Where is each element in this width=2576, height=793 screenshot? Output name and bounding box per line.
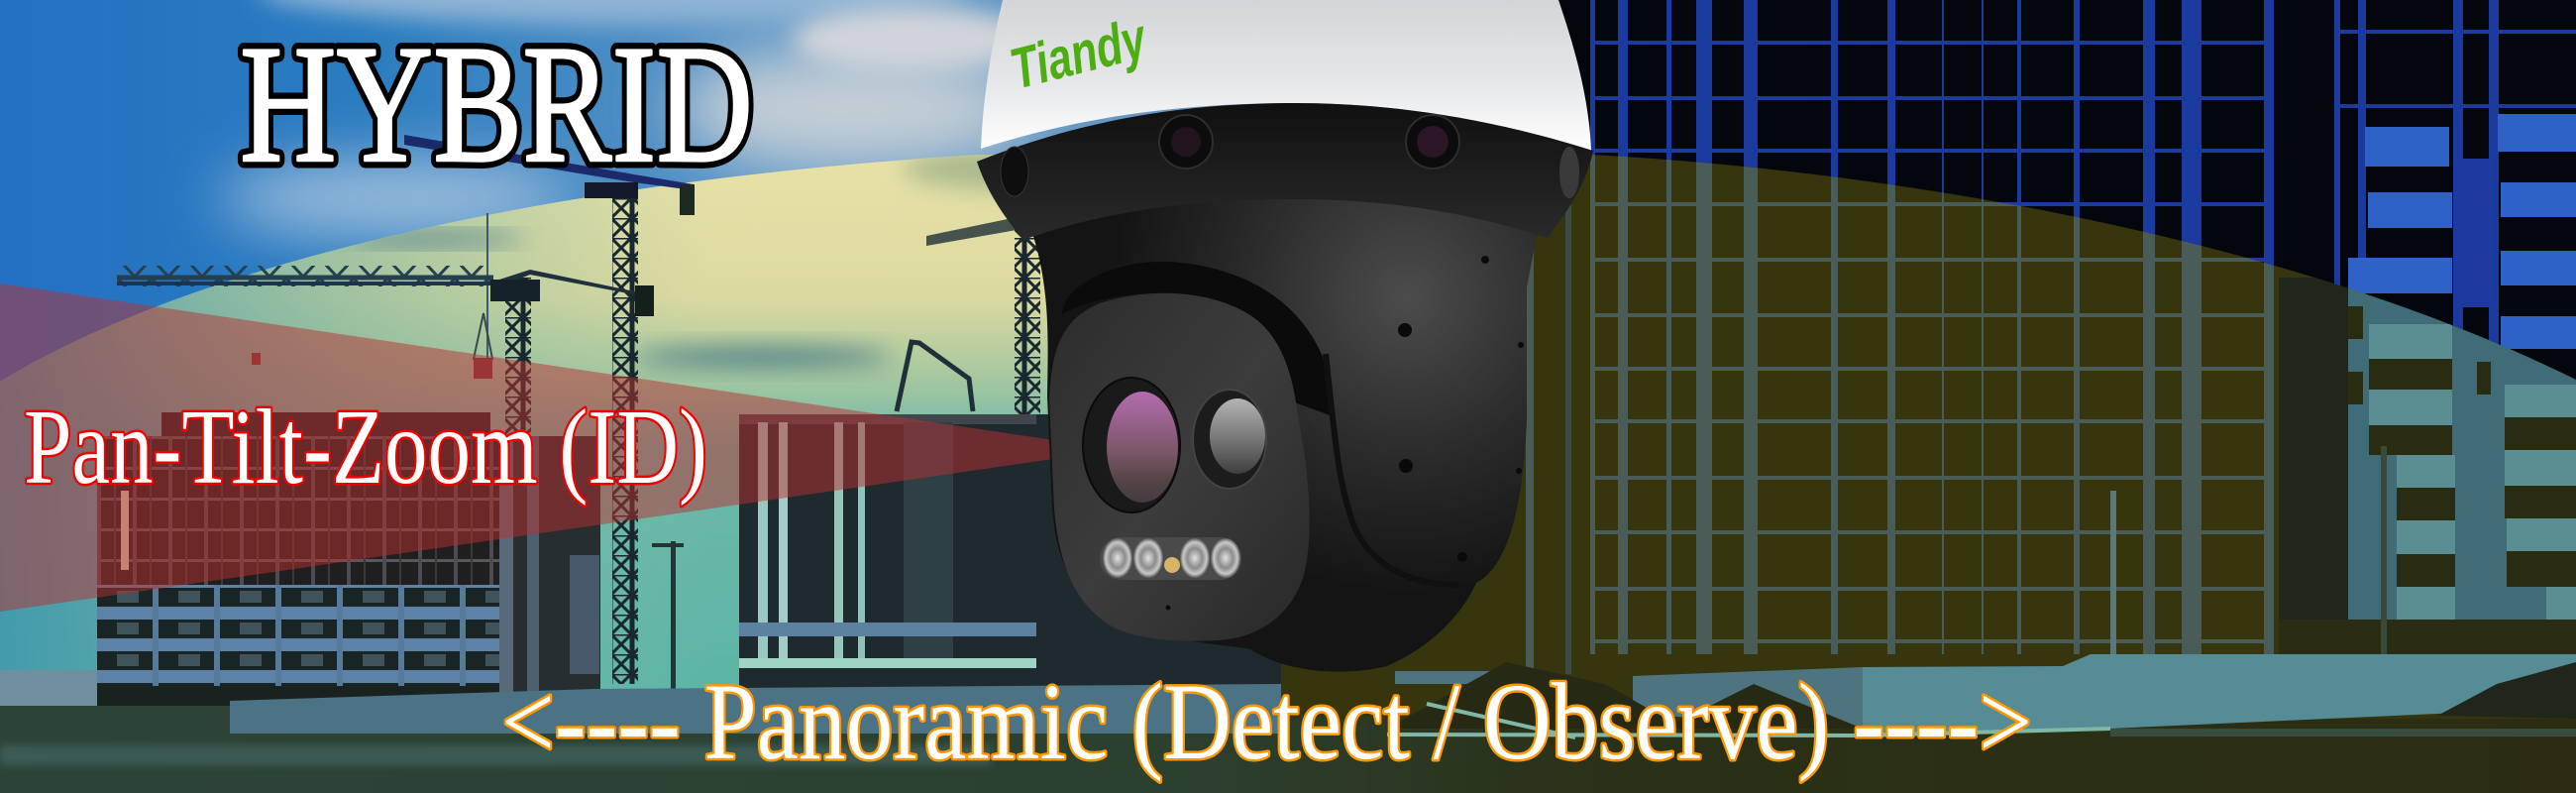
title: HYBRID: HYBRID bbox=[240, 11, 753, 197]
background: illuminated sky inside panoramic fan bbox=[0, 155, 1048, 689]
building: centre block bbox=[739, 414, 1284, 692]
crane: right distant crane and concrete boom bbox=[897, 210, 1050, 436]
camera: small lens bbox=[1193, 390, 1266, 489]
ground: right embankment and mounds bbox=[1387, 654, 2576, 737]
background: horizon bbox=[0, 670, 238, 714]
camera: arm shadow bbox=[1326, 354, 1458, 585]
camera: lower body bbox=[1031, 183, 1538, 672]
camera: white dome bbox=[981, 0, 1591, 151]
camera: screws bbox=[1165, 256, 1524, 611]
building: left block bbox=[97, 412, 600, 712]
camera bbox=[977, 0, 1593, 672]
ground: foreground strip bbox=[0, 684, 2576, 793]
camera: LED strip bbox=[1100, 537, 1241, 580]
camera: large lens bbox=[1083, 378, 1180, 512]
label: Panoramic (Detect / Observe): <---- Panoramic (Detect / Observe) ----> bbox=[501, 661, 2032, 782]
title: HYBRID: HYBRID bbox=[240, 11, 753, 197]
crane: tall tower crane bbox=[404, 135, 695, 684]
Pan-Tilt-Zoom red field of view wedge bbox=[0, 283, 1060, 612]
camera: recess above head bbox=[1062, 262, 1333, 416]
camera: panoramic lenses bbox=[1001, 115, 1579, 198]
camera: front head bbox=[1049, 293, 1310, 641]
label: Pan-Tilt-Zoom (ID): Pan-Tilt-Zoom (ID) bbox=[24, 389, 707, 507]
pole: utility pole bbox=[652, 541, 684, 714]
camera: black sensor band bbox=[977, 103, 1593, 240]
crane: second tower crane bbox=[117, 266, 654, 436]
panoramic fan: olive tinted buildings on the right bbox=[1281, 155, 2576, 719]
building: right towers seen in blue above fan bbox=[1546, 0, 2576, 654]
